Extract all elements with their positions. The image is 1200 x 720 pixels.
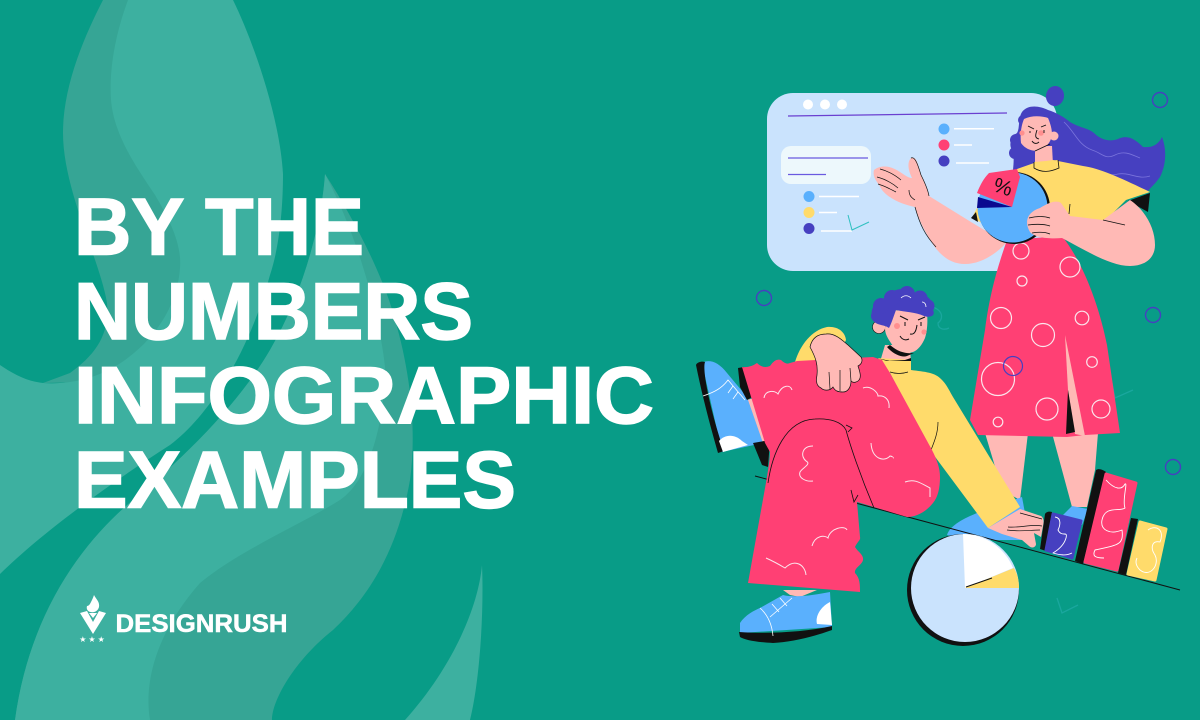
shoes [947, 497, 1088, 540]
yellow sweater [877, 358, 1020, 528]
legs [985, 433, 1098, 507]
presenting arm [874, 158, 1006, 264]
head [872, 310, 927, 357]
decorative circles [756, 92, 1180, 474]
curly hair [871, 286, 934, 328]
logo stars: ★★★ [79, 635, 107, 644]
presenting arm lines [877, 158, 936, 247]
illustration [696, 85, 1180, 646]
decorative ticks and squiggle [933, 307, 1133, 613]
yellow shoulder [795, 327, 846, 362]
seesaw pie chart [907, 534, 1019, 646]
seesaw line [755, 476, 1180, 590]
title: INFOGRAPHIC [74, 351, 654, 441]
lower shoe [739, 592, 832, 643]
board callout box [781, 146, 871, 184]
neck [880, 345, 911, 364]
block: yellow [1118, 518, 1166, 580]
board check mark [848, 215, 869, 230]
block: purple [1040, 512, 1081, 558]
seated man [696, 286, 1044, 643]
raised foot ankle [746, 398, 768, 445]
reaching hand [988, 509, 1044, 547]
board legend top [938, 124, 994, 166]
lower ankle [783, 590, 817, 597]
board legend bottom [804, 191, 859, 234]
pie chart held [977, 169, 1050, 244]
red trousers [742, 357, 940, 592]
hair strands [1064, 122, 1150, 177]
holding arm and hand [1027, 200, 1155, 266]
woman figure [874, 85, 1165, 540]
neck and head [1021, 116, 1058, 165]
yellow top [971, 160, 1150, 232]
trouser cloud marks [764, 386, 930, 575]
title: BY THE [74, 182, 364, 272]
raised shoe [696, 361, 763, 453]
icon: flame and chevron [80, 595, 106, 634]
hair [1009, 85, 1165, 191]
dress circles [982, 243, 1110, 427]
title: EXAMPLES [74, 436, 516, 526]
trouser cuff shadow [738, 367, 770, 467]
dress [970, 236, 1120, 437]
logo wordmark: DESIGNRUSH [116, 610, 288, 638]
face details [1019, 125, 1050, 151]
title [74, 182, 654, 526]
pie chart held: % [990, 174, 1015, 201]
purple overlay circle [1004, 356, 1022, 376]
block: red [1075, 469, 1136, 570]
hand on knee [810, 334, 862, 392]
logo: DesignRush [79, 595, 288, 644]
stacked blocks [1040, 469, 1166, 580]
trouser outlines [768, 419, 874, 508]
title: NUMBERS [74, 267, 473, 357]
background flame shapes [0, 0, 482, 720]
panel: presentation board [767, 93, 1057, 271]
